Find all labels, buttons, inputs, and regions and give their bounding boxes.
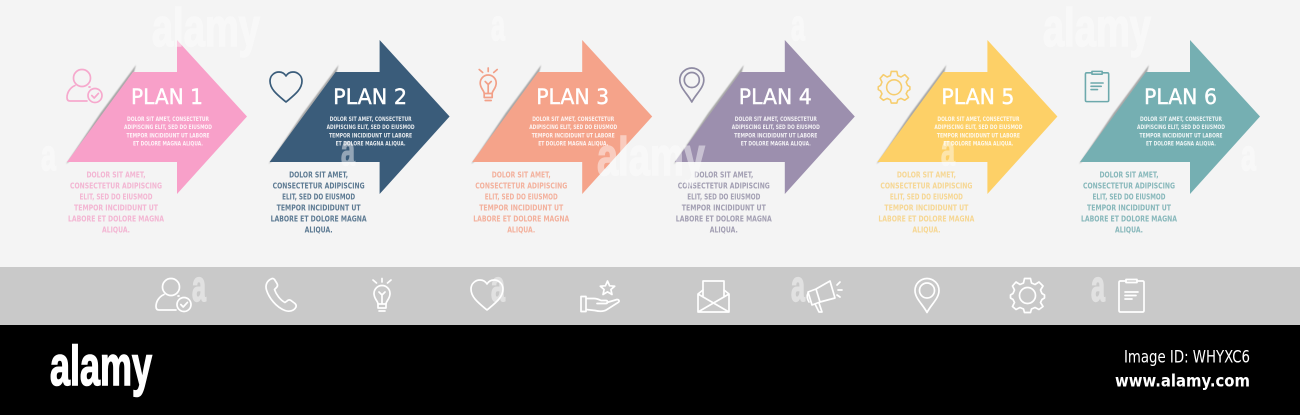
plan 2 arrow text: DOLOR SIT AMET, CONSECTETUR — [330, 117, 412, 123]
plan 3 icon: light bulb — [479, 68, 497, 100]
plan 4 description: DOLOR SIT AMET, — [694, 170, 753, 180]
plan 3 arrow text: TEMPOR INCIDIDUNT UT LABORE — [532, 134, 615, 140]
plan 5 arrow text: ET DOLORE MAGNA ALIQUA. — [943, 142, 1013, 148]
watermarks — [41, 0, 1256, 311]
plan 1 description: CONSECTETUR ADIPISCING — [70, 182, 162, 190]
watermarks: a — [1241, 131, 1256, 180]
bar icon: clipboard — [1119, 280, 1144, 312]
plan 1 description: ALIQUA. — [102, 226, 130, 234]
plan 2 description — [271, 170, 367, 234]
plan 5 arrow text: TEMPOR INCIDIDUNT UT LABORE — [937, 134, 1020, 140]
plan 1 arrow — [67, 40, 247, 194]
plan 2 description: LABORE ET DOLORE MAGNA — [271, 214, 367, 224]
plan 2 description: CONSECTETUR ADIPISCING — [273, 182, 365, 190]
plan 1 arrow text: ADIPISCING ELIT, SED DO EIUSMOD — [124, 125, 212, 131]
plan 3 description: TEMPOR INCIDIDUNT UT — [479, 204, 564, 212]
footer logo: alamy — [50, 334, 152, 397]
plan 6 icon: clipboard — [1085, 71, 1109, 102]
watermarks: a — [192, 262, 206, 311]
grey icon bar — [0, 267, 1300, 325]
plan 1 description: DOLOR SIT AMET, — [86, 170, 146, 180]
bar icon: heart — [471, 280, 503, 310]
plan 1 arrow text — [124, 117, 212, 148]
plan 1 arrow text: DOLOR SIT AMET, CONSECTETUR — [127, 117, 209, 123]
plan 2 panel — [269, 40, 450, 234]
plan 5 description: TEMPOR INCIDIDUNT UT — [884, 204, 969, 212]
plan 4 description: ELIT, SED DO EIUSMOD — [687, 192, 760, 202]
plan 4 description — [676, 170, 772, 234]
footer image id: Image ID: WHYXC6 — [1124, 348, 1250, 366]
plan 1 description — [68, 170, 164, 234]
plan 1 icon: user — [67, 70, 102, 102]
plan 6 description: LABORE ET DOLORE MAGNA — [1081, 214, 1177, 224]
plan 5 arrow — [877, 40, 1057, 194]
bar icon: map pin — [915, 278, 939, 312]
plan 3 arrow — [472, 40, 652, 194]
plan 4 panel — [674, 40, 855, 234]
plan 3 description: DOLOR SIT AMET, — [492, 170, 551, 180]
plan 6 description — [1081, 170, 1177, 234]
plan 6 arrow text: ET DOLORE MAGNA ALIQUA. — [1146, 142, 1216, 148]
plan 5 arrow text — [934, 117, 1023, 148]
plan 6 arrow text: TEMPOR INCIDIDUNT UT LABORE — [1140, 134, 1223, 140]
plan 4 icon: map pin — [680, 68, 704, 102]
watermarks: a — [41, 131, 56, 180]
plan 4 description: CONSECTETUR ADIPISCING — [678, 182, 770, 190]
watermarks: a — [1091, 262, 1105, 311]
plan 5 panel — [876, 40, 1057, 234]
plan 6 description: TEMPOR INCIDIDUNT UT — [1087, 204, 1172, 212]
plan 4 arrow text: ET DOLORE MAGNA ALIQUA. — [741, 142, 811, 148]
black footer — [0, 325, 1300, 415]
plan 6 arrow text — [1137, 117, 1225, 148]
plan 1 arrow text: TEMPOR INCIDIDUNT UT LABORE — [126, 134, 210, 140]
plan 4 description: TEMPOR INCIDIDUNT UT — [682, 204, 766, 212]
bar icon: megaphone — [807, 281, 842, 312]
plan 6 description: CONSECTETUR ADIPISCING — [1083, 182, 1175, 190]
plan 6 heading: PLAN 6 — [1144, 85, 1217, 110]
plan 6 arrow text: ADIPISCING ELIT, SED DO EIUSMOD — [1137, 125, 1225, 131]
plan 6 description: ELIT, SED DO EIUSMOD — [1092, 192, 1166, 202]
plan 3 arrow text — [529, 117, 617, 148]
plan 2 heading: PLAN 2 — [333, 85, 407, 110]
watermarks: a — [491, 1, 505, 50]
plan 4 description: ALIQUA. — [710, 226, 738, 234]
plan 1 panel — [66, 40, 247, 234]
bar icon: envelope — [698, 281, 729, 312]
plan 6 arrow — [1080, 40, 1260, 194]
plan 5 arrow text: DOLOR SIT AMET, CONSECTETUR — [937, 117, 1020, 123]
plan 5 description: ELIT, SED DO EIUSMOD — [890, 192, 963, 202]
bar icon: light bulb — [373, 278, 391, 311]
plan 4 arrow text: DOLOR SIT AMET, CONSECTETUR — [735, 117, 817, 123]
plan 1 description: TEMPOR INCIDIDUNT UT — [74, 204, 159, 212]
plan 1 description: ELIT, SED DO EIUSMOD — [80, 192, 152, 202]
plan 1 heading: PLAN 1 — [131, 85, 203, 110]
bar icon: gear — [1010, 278, 1044, 312]
plan 3 description — [473, 170, 569, 234]
plan 3 heading: PLAN 3 — [536, 85, 609, 110]
plan 2 description: DOLOR SIT AMET, — [289, 170, 348, 180]
plan 1 arrow text: ET DOLORE MAGNA ALIQUA. — [133, 142, 203, 148]
plan 2 description: ELIT, SED DO EIUSMOD — [282, 192, 355, 202]
plan 2 arrow text: ADIPISCING ELIT, SED DO EIUSMOD — [327, 125, 415, 131]
plan 2 arrow text — [327, 117, 415, 148]
plan 4 arrow text — [732, 117, 820, 148]
plan 2 arrow — [270, 40, 450, 194]
footer url: www.alamy.com — [1115, 372, 1250, 392]
plan 2 description: TEMPOR INCIDIDUNT UT — [277, 204, 361, 212]
plan 2 description: ALIQUA. — [305, 226, 333, 234]
plan 6 panel — [1079, 40, 1260, 234]
plan 3 arrow text: ADIPISCING ELIT, SED DO EIUSMOD — [529, 125, 617, 131]
watermarks: alamy — [597, 127, 705, 187]
plan 3 description: CONSECTETUR ADIPISCING — [475, 182, 567, 190]
bar icon: phone — [266, 279, 296, 311]
plan 4 heading: PLAN 4 — [739, 85, 812, 110]
plan 3 arrow text: DOLOR SIT AMET, CONSECTETUR — [532, 117, 615, 123]
plan 6 arrow text: DOLOR SIT AMET, CONSECTETUR — [1140, 117, 1222, 123]
plan 4 arrow text: ADIPISCING ELIT, SED DO EIUSMOD — [732, 125, 820, 131]
plan 5 description: ALIQUA. — [912, 226, 940, 234]
bar icon: hand with star — [581, 281, 619, 312]
plan 5 heading: PLAN 5 — [941, 85, 1014, 110]
plan 3 description: ALIQUA. — [507, 226, 535, 234]
plan 6 description: DOLOR SIT AMET, — [1100, 170, 1159, 180]
plan 3 description: LABORE ET DOLORE MAGNA — [473, 214, 569, 224]
watermarks: a — [341, 126, 355, 175]
plan 4 description: LABORE ET DOLORE MAGNA — [676, 214, 772, 224]
plan 2 icon: heart — [270, 72, 302, 102]
watermarks: a — [791, 1, 805, 50]
plan 5 description: CONSECTETUR ADIPISCING — [880, 182, 972, 190]
plan 4 arrow text: TEMPOR INCIDIDUNT UT LABORE — [734, 134, 817, 140]
plan 3 arrow text: ET DOLORE MAGNA ALIQUA. — [538, 142, 608, 148]
plan 5 arrow text: ADIPISCING ELIT, SED DO EIUSMOD — [934, 125, 1023, 131]
plan 2 arrow text: TEMPOR INCIDIDUNT UT LABORE — [329, 134, 412, 140]
watermarks: a — [791, 262, 805, 311]
watermarks: a — [941, 126, 955, 175]
plan 5 icon: gear — [878, 71, 910, 103]
plan 2 arrow text: ET DOLORE MAGNA ALIQUA. — [336, 142, 406, 148]
plan 1 description: LABORE ET DOLORE MAGNA — [68, 214, 164, 224]
plan 3 description: ELIT, SED DO EIUSMOD — [485, 192, 558, 202]
plan 6 description: ALIQUA. — [1115, 226, 1143, 234]
plan 3 panel — [471, 40, 652, 234]
plan 4 arrow — [675, 40, 855, 194]
watermarks: a — [491, 262, 505, 311]
bar icon: user — [156, 278, 191, 312]
plan 5 description — [878, 170, 974, 234]
plan 5 description: LABORE ET DOLORE MAGNA — [878, 214, 974, 224]
plan 5 description: DOLOR SIT AMET, — [897, 170, 956, 180]
